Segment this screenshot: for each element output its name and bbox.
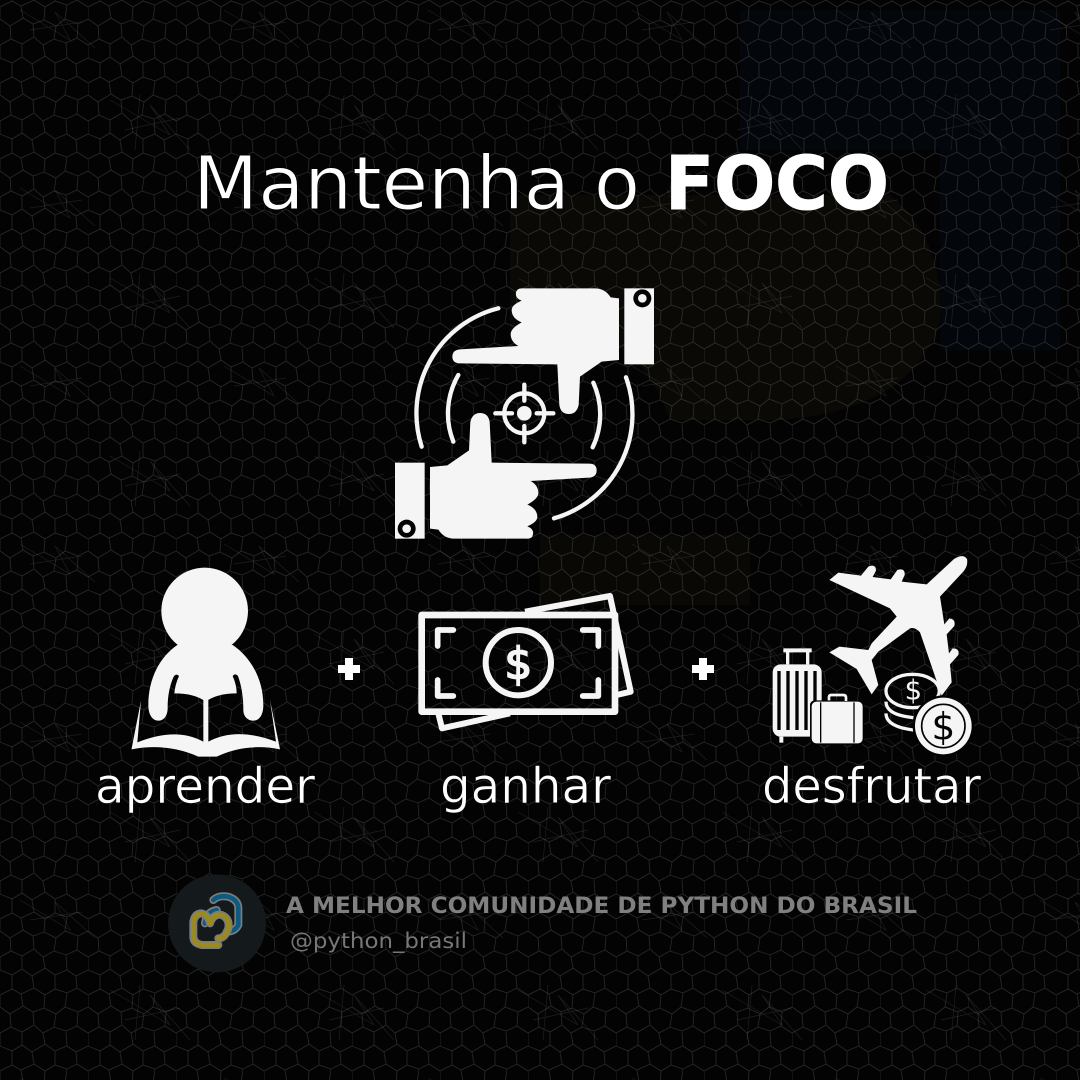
crosshair target [495, 385, 553, 442]
icon: person reading a book [132, 568, 280, 757]
briefcase [810, 700, 864, 745]
coin stack [886, 674, 939, 730]
title [193, 141, 889, 227]
title: Mantenha o [193, 141, 640, 227]
label: desfrutar: desfrutar [762, 758, 982, 815]
plus sign 2 [692, 658, 714, 680]
footer tagline: A MELHOR COMUNIDADE DE PYTHON DO BRASIL [286, 894, 917, 919]
large dollar coin [913, 695, 974, 757]
icon: plane, luggage and coins: $ [931, 704, 955, 748]
yellow snake [193, 913, 229, 945]
icon: banknotes: $ [504, 639, 532, 690]
upper hand [452, 288, 654, 414]
plus sign 1 [338, 658, 360, 680]
footer handle: @python_brasil [290, 929, 467, 954]
label: ganhar: ganhar [440, 758, 612, 815]
icon: plane, luggage and coins: $ [905, 675, 922, 706]
title: FOCO [665, 141, 889, 227]
lower hand [395, 413, 597, 539]
focus arcs [416, 308, 632, 518]
airplane [829, 556, 967, 696]
icon: hands framing a target [395, 288, 654, 539]
icon: plane, luggage and coins [773, 556, 974, 757]
icon: banknotes [422, 596, 631, 728]
suitcase [783, 648, 812, 664]
blue snake [205, 896, 238, 932]
label: aprender: aprender [95, 758, 316, 815]
footer logo: Python Brasil [168, 874, 266, 972]
